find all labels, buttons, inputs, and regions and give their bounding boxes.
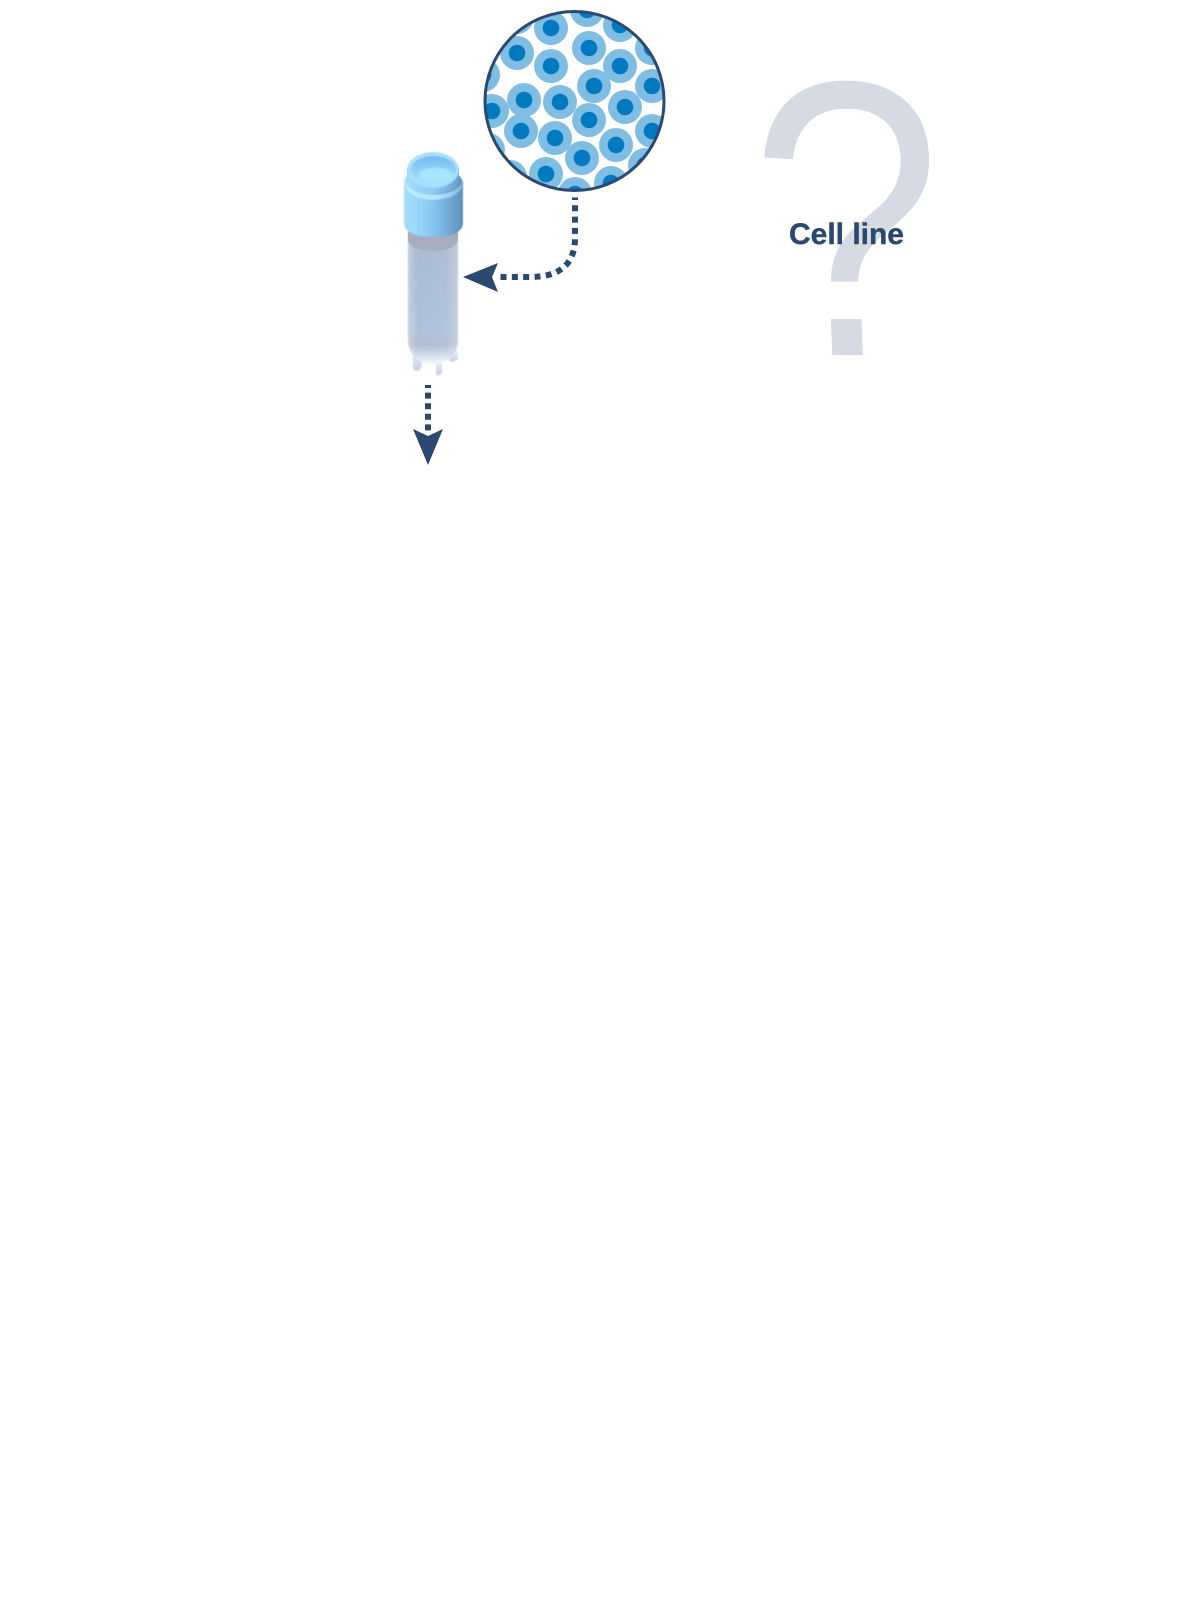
infographic canvas — [404, 10, 929, 465]
cap neck — [407, 168, 459, 193]
cap rim — [407, 152, 459, 188]
tube feet — [413, 350, 458, 375]
large question mark: ? — [742, 0, 954, 441]
cap body — [404, 175, 463, 237]
arrow: vial downward — [413, 385, 443, 465]
cell culture magnified circle — [484, 10, 666, 192]
icon: cryovial tube — [404, 152, 463, 375]
cap opening — [411, 156, 456, 183]
cap shoulder highlight — [405, 181, 463, 200]
cap shadow on tube — [408, 228, 458, 251]
arrow: circle to vial — [463, 198, 575, 292]
label: Cell line: Cell line — [789, 218, 904, 251]
tube body — [408, 225, 458, 364]
